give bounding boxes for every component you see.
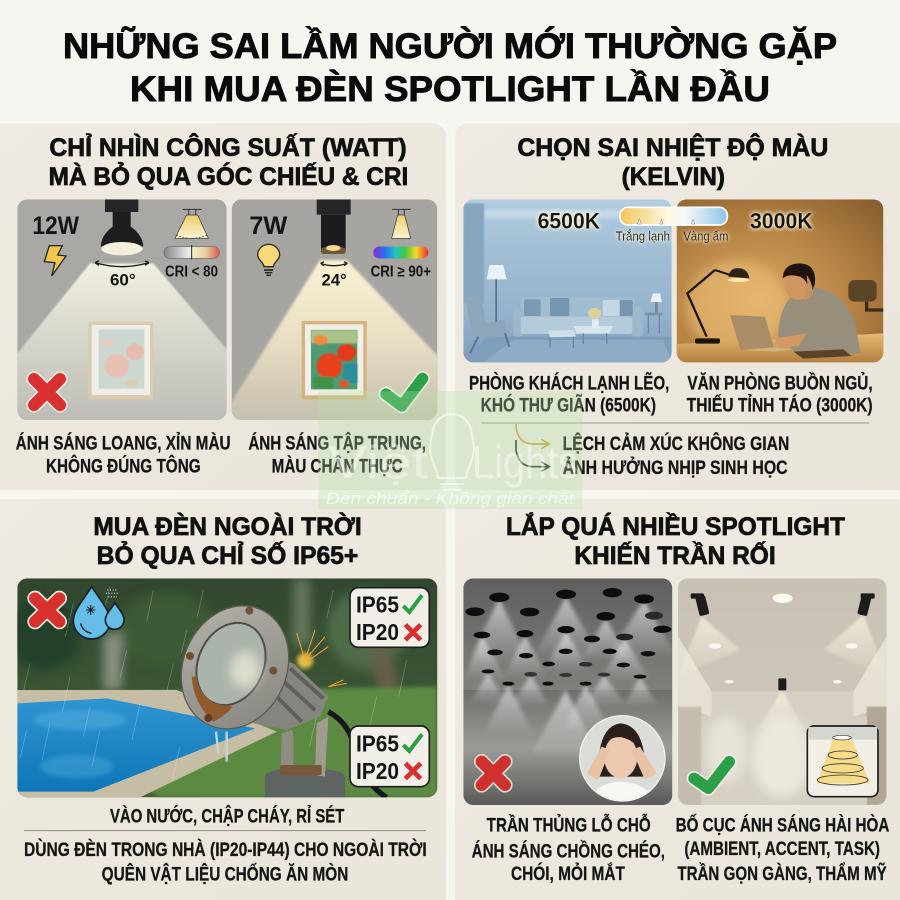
watermark brand right: Lights <box>472 436 578 488</box>
image: cluttered ceiling <box>463 578 677 805</box>
label: cool white: Trắng lạnh <box>616 229 670 244</box>
icon: lightning bolt <box>44 246 66 276</box>
caption: wide beam result: ÁNH SÁNG LOANG, XỈN MÀU <box>16 431 231 454</box>
consequences text: LỆCH CẢM XÚC KHÔNG GIAN <box>563 431 789 455</box>
recessed lights <box>709 594 858 683</box>
pool deck <box>17 690 277 797</box>
icon: wide beam diagram <box>175 209 208 238</box>
label: warm yellow: Vàng ấm <box>683 230 728 244</box>
icon: red cross <box>482 762 505 785</box>
icon: 60 degree arc <box>95 261 149 267</box>
label: 6500K: 6500K <box>538 208 600 233</box>
heading: ceiling clutter <box>506 511 845 570</box>
arrow: dark <box>516 440 549 471</box>
icon: narrow beam diagram <box>392 209 411 238</box>
label: CRI below 80: CRI < 80 <box>165 264 218 281</box>
caption: cluttered ceiling: CHÓI, MỎI MẮT <box>511 861 625 885</box>
picture: vivid poppies <box>302 321 367 399</box>
heading: kelvin: (KELVIN) <box>622 163 725 191</box>
label: 7W: 7W <box>249 212 287 240</box>
caption: cluttered ceiling <box>472 813 665 885</box>
heading: IP rating: MUA ĐÈN NGOÀI TRỜI <box>93 511 362 541</box>
image: tidy ceiling <box>678 578 887 805</box>
icon: high CRI rainbow bar <box>373 247 428 258</box>
sofa <box>513 297 643 337</box>
icon: red cross <box>35 598 59 622</box>
heading: wattage <box>49 132 408 191</box>
icon: water drops <box>73 587 124 639</box>
color temperature scale <box>620 207 727 225</box>
spotlight lamp <box>162 588 328 777</box>
caption: cold living room: PHÒNG KHÁCH LẠNH LẼO, <box>469 370 669 394</box>
recessed holes <box>465 588 671 686</box>
light cones <box>463 597 677 757</box>
notebook <box>793 349 852 359</box>
caption: cause: QUÊN VẬT LIỆU CHỐNG ĂN MÒN <box>102 862 348 886</box>
watermark slogan: Đèn chuẩn - Không gian chất <box>326 489 575 508</box>
caption: tidy ceiling <box>676 813 889 885</box>
panel: outdoor IP mistake <box>0 499 446 900</box>
image: rainy pool with rusty lamp <box>7 578 437 797</box>
label: 3000K: 3000K <box>750 208 813 233</box>
image: 12W wide beam wall <box>13 199 232 427</box>
post <box>265 768 345 797</box>
caption: narrow beam result <box>248 430 426 478</box>
heading: wattage: CHỈ NHÌN CÔNG SUẤT (WATT) <box>49 132 407 162</box>
heading: IP rating <box>93 511 362 570</box>
caption: cluttered ceiling: ÁNH SÁNG CHỒNG CHÉO, <box>472 838 665 862</box>
caption: cause <box>24 837 427 886</box>
badge: IP ratings bottom: IP20 <box>356 758 399 784</box>
sparks <box>297 630 347 687</box>
track heads <box>691 593 875 690</box>
laptop <box>730 315 793 352</box>
label: 12W: 12W <box>32 212 79 240</box>
image: warm office <box>677 199 883 362</box>
desk lamp <box>687 268 749 344</box>
panel: too many spotlights mistake <box>455 499 900 900</box>
icon: green check <box>386 378 423 406</box>
icon: narrow spotlight fixture <box>317 199 351 254</box>
heading: kelvin <box>517 132 828 191</box>
panel: color temperature mistake <box>455 123 900 490</box>
caption: warm office <box>687 370 873 416</box>
floor lamp <box>487 265 507 326</box>
pool water <box>17 698 255 792</box>
label: CRI 90 plus: CRI ≥ 90+ <box>371 264 431 281</box>
caption: narrow beam result: MÀU CHÂN THỰC <box>272 454 403 478</box>
heading: IP rating: BỎ QUA CHỈ SỐ IP65+ <box>97 539 358 570</box>
cable <box>328 712 387 797</box>
icon: low CRI bar <box>164 245 219 259</box>
caption: damage: VÀO NƯỚC, CHẬP CHÁY, RỈ SÉT <box>110 804 344 828</box>
image: cold living room <box>463 199 672 362</box>
beams <box>678 615 887 730</box>
armchair <box>466 303 510 354</box>
caption: cluttered ceiling: TRẦN THỦNG LỖ CHỖ <box>487 813 651 837</box>
watermark <box>318 391 582 509</box>
heading: kelvin: CHỌN SAI NHIỆT ĐỘ MÀU <box>517 132 828 162</box>
wall glow <box>752 717 812 797</box>
icon: wide spotlight fixture <box>101 199 143 255</box>
badge: IP ratings top: IP65 <box>356 592 399 618</box>
icon: layered light diagram <box>807 726 878 797</box>
title: NHỮNG SAI LẦM NGƯỜI MỚI THƯỜNG GẶP <box>63 26 837 66</box>
watermark bulb icon <box>430 414 474 490</box>
caption: cause: DÙNG ĐÈN TRONG NHÀ (IP20-IP44) CHO NGOÀI TRỜI <box>24 837 427 861</box>
caption: cold living room: KHÓ THƯ GIÃN (6500K) <box>481 392 656 416</box>
side soffits and back wall <box>678 637 712 717</box>
title: KHI MUA ĐÈN SPOTLIGHT LẦN ĐẦU <box>130 69 770 109</box>
rain <box>20 587 407 780</box>
title <box>63 26 837 109</box>
consequences text <box>563 431 789 479</box>
office chair <box>848 280 883 310</box>
icon: green check <box>694 762 729 788</box>
caption: wide beam result <box>16 431 231 478</box>
watermark brand left: Việt <box>328 436 428 488</box>
badge: IP ratings bottom: IP65 <box>356 731 399 757</box>
coffee table and flowers <box>548 308 613 348</box>
icon: light bulb <box>258 244 280 275</box>
avatar: woman with headache <box>579 715 667 803</box>
picture: faded poppies <box>88 322 153 399</box>
heading: wattage: MÀ BỎ QUA GÓC CHIẾU & CRI <box>49 160 408 191</box>
heading: ceiling clutter: LẮP QUÁ NHIỀU SPOTLIGHT <box>506 511 845 541</box>
icon: 24 degree arc <box>321 262 347 266</box>
side table lamp <box>645 293 662 333</box>
image: 7W narrow beam wall <box>227 199 443 427</box>
caption: narrow beam result: ÁNH SÁNG TẬP TRUNG, <box>248 430 426 454</box>
badge: IP ratings top <box>350 588 429 647</box>
arrow: gold <box>516 424 549 449</box>
tired man <box>775 263 861 353</box>
caption: cold living room <box>469 370 669 416</box>
badge: IP ratings top: IP20 <box>356 619 399 645</box>
badge: IP ratings bottom <box>350 726 429 787</box>
label: 24 degrees: 24° <box>322 271 347 290</box>
icon: red cross <box>34 379 60 405</box>
lawn <box>125 684 438 798</box>
label: 60 degrees: 60° <box>110 271 136 290</box>
caption: wide beam result: KHÔNG ĐÚNG TÔNG <box>46 454 201 478</box>
consequences text: ẢNH HƯỞNG NHỊP SINH HỌC <box>563 455 788 479</box>
heading: ceiling clutter: KHIẾN TRẦN RỐI <box>574 540 776 570</box>
panel: wattage mistake <box>0 123 446 490</box>
